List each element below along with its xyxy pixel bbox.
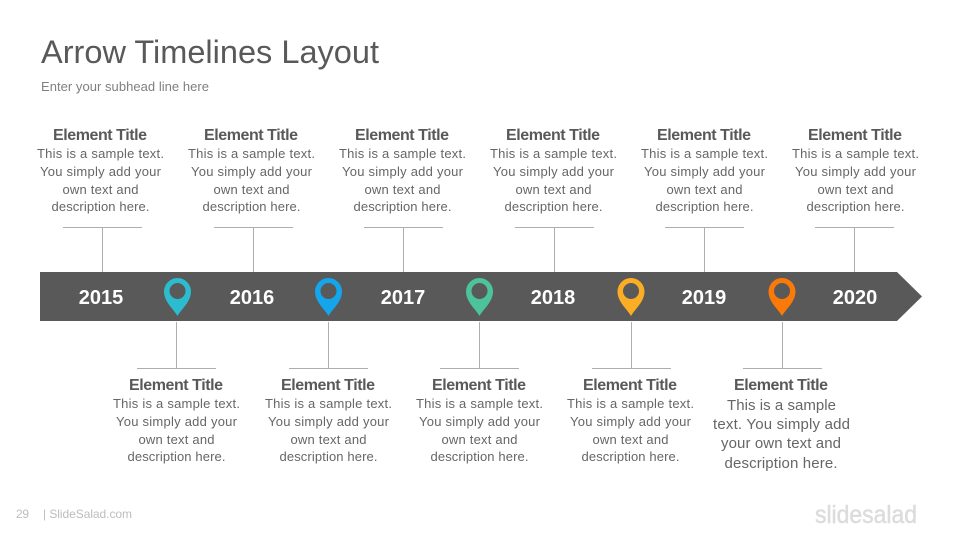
text block: 2017: This is a sample text. (339, 146, 466, 161)
text block: pin 5: Element Title (734, 377, 828, 394)
text block: 2018: This is a sample text. (490, 146, 617, 161)
text block: pin 3: This is a sample text. (416, 396, 543, 411)
text block: 2016: own text and (214, 182, 290, 197)
text block: 2018: You simply add your (493, 164, 615, 179)
text block: pin 3: Element Title (432, 377, 526, 394)
text block: pin 2: You simply add your (268, 414, 390, 429)
text block: pin 1 (113, 377, 240, 464)
text block: 2016: This is a sample text. (188, 146, 315, 161)
text block: pin 2: description here. (280, 449, 378, 464)
text block: pin 1: description here. (128, 449, 226, 464)
text block: 2019: own text and (666, 182, 742, 197)
text block: 2017: description here. (354, 199, 452, 214)
connector: 2015 (63, 228, 142, 272)
text block: pin 2: Element Title (281, 377, 375, 394)
text block: pin 2: This is a sample text. (265, 396, 392, 411)
year labels: 2017 (381, 287, 425, 309)
subhead: Enter your subhead line here (41, 79, 209, 94)
text block: pin 1: own text and (138, 432, 214, 447)
icon: green pin (466, 278, 493, 316)
text block: 2019 (641, 127, 768, 214)
text block: 2018: own text and (516, 182, 592, 197)
text block: pin 3 (416, 377, 543, 464)
text block: pin 1: This is a sample text. (113, 396, 240, 411)
text block: 2016: You simply add your (191, 164, 313, 179)
text block: 2020: description here. (806, 199, 904, 214)
text block: 2019: This is a sample text. (641, 146, 768, 161)
connector: 2016 (214, 228, 293, 272)
year labels: 2016 (230, 287, 274, 309)
text block: 2015: You simply add your (40, 164, 162, 179)
footer source: | SlideSalad.com (43, 507, 132, 521)
connector: 2017 (364, 228, 443, 272)
text block: 2018: Element Title (506, 127, 600, 144)
text block: 2015: Element Title (53, 127, 147, 144)
text block: 2018: description here. (504, 199, 602, 214)
text block: 2020: own text and (818, 182, 894, 197)
connector: 2020 (815, 228, 894, 272)
text block: 2016: description here. (202, 199, 300, 214)
text block: pin 4: own text and (592, 432, 668, 447)
text block: 2015: This is a sample text. (37, 146, 164, 161)
connector: 2019 (665, 228, 744, 272)
text block: pin 4: You simply add your (570, 414, 692, 429)
icon: yellow pin (618, 278, 644, 316)
icon: blue pin (315, 278, 342, 316)
title: Arrow Timelines Layout (41, 34, 379, 70)
text block: pin 5: description here. (724, 455, 838, 472)
text block: pin 4: This is a sample text. (567, 396, 694, 411)
connector: pin 3 (440, 322, 519, 368)
text block: 2018 (490, 127, 617, 214)
text block: pin 1: Element Title (129, 377, 223, 394)
text block: 2015 (37, 127, 164, 214)
year labels: 2015 (79, 287, 123, 309)
icon: orange pin (768, 278, 796, 316)
text block: 2019: description here. (656, 199, 754, 214)
page number: 29 (16, 507, 29, 521)
text block: pin 3: You simply add your (419, 414, 541, 429)
text block: 2016 (188, 127, 315, 214)
text block: 2019: You simply add your (644, 164, 766, 179)
text block: pin 4 (567, 377, 694, 464)
text block: pin 2 (265, 377, 392, 464)
text block: 2020: Element Title (808, 127, 902, 144)
text block: 2020: You simply add your (795, 164, 917, 179)
text block: 2020: This is a sample text. (792, 146, 919, 161)
year labels: 2018 (531, 287, 575, 309)
year labels: 2020 (833, 287, 877, 309)
text block: 2015: description here. (52, 199, 150, 214)
text block: 2015: own text and (62, 182, 138, 197)
text block: pin 5: text. You simply add (713, 416, 850, 433)
icon: teal pin (164, 278, 191, 316)
text block: 2020 (792, 127, 919, 214)
text block: 2017: own text and (364, 182, 440, 197)
year labels: 2019 (682, 287, 726, 309)
text block: pin 5 (713, 377, 850, 472)
connector: pin 5 (743, 322, 822, 368)
text block: pin 4: description here. (582, 449, 680, 464)
text block: 2017 (339, 127, 466, 214)
text block: pin 3: own text and (442, 432, 518, 447)
year labels (79, 287, 877, 309)
text block: pin 5: This is a sample (727, 397, 836, 414)
text block: 2016: Element Title (204, 127, 298, 144)
text block: 2019: Element Title (657, 127, 751, 144)
text block: pin 1: You simply add your (116, 414, 238, 429)
connector: 2018 (515, 228, 594, 272)
arrow timeline bar (40, 272, 922, 321)
text block: pin 5: your own text and (721, 435, 841, 452)
text block: pin 2: own text and (290, 432, 366, 447)
connector: pin 4 (592, 322, 671, 368)
connector: pin 1 (137, 322, 216, 368)
connector: pin 2 (289, 322, 368, 368)
logo: slidesalad: slidesalad (815, 501, 917, 529)
text block: 2017: Element Title (355, 127, 449, 144)
text block: pin 3: description here. (430, 449, 528, 464)
text block: pin 4: Element Title (583, 377, 677, 394)
text block: 2017: You simply add your (342, 164, 464, 179)
